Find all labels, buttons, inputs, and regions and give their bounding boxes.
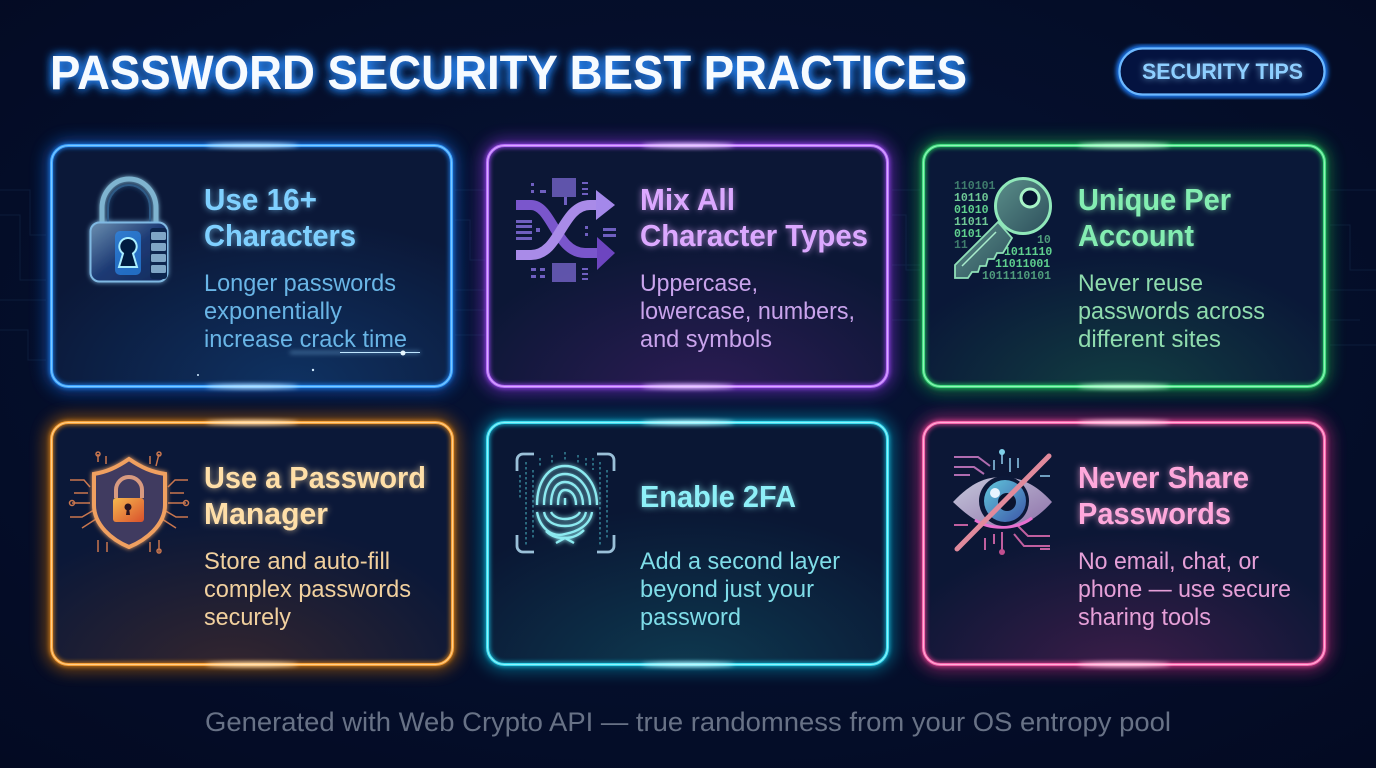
heading: Manager	[204, 496, 328, 531]
card frame: green	[924, 144, 1324, 388]
icon: key with binary digits: 1011110	[1004, 246, 1052, 259]
icon: key with binary digits: 1011110101	[982, 270, 1051, 283]
badge: security tips	[1120, 48, 1324, 94]
description: and symbols	[640, 326, 772, 353]
badge: security tips: SECURITY TIPS	[1142, 59, 1303, 84]
card frame: orange	[52, 420, 452, 666]
panel: never share passwords	[924, 420, 1324, 666]
heading	[204, 460, 426, 531]
card frame: purple	[488, 144, 888, 388]
heading: Use 16+	[204, 182, 317, 217]
card frame: blue	[52, 144, 452, 388]
panel: mix all character types	[488, 144, 888, 388]
description: securely	[204, 604, 291, 631]
description: sharing tools	[1078, 604, 1211, 631]
icon: key with binary digits: 11011	[954, 216, 989, 229]
description	[204, 548, 411, 631]
heading	[640, 182, 868, 253]
heading: Account	[1078, 218, 1194, 253]
panel: use a password manager	[52, 420, 452, 666]
heading: Passwords	[1078, 496, 1231, 531]
description: exponentially	[204, 298, 342, 325]
heading	[204, 182, 356, 253]
description: lowercase, numbers,	[640, 298, 855, 325]
heading: Characters	[204, 218, 356, 253]
icon: key with binary digits: 110101	[954, 180, 996, 193]
icon: key with binary digits: 11011001	[995, 258, 1050, 271]
icon: key with binary digits: 10110	[954, 192, 989, 205]
description	[640, 548, 840, 631]
icon: key with binary digits	[954, 178, 1052, 283]
description: Longer passwords	[204, 270, 396, 297]
description: Uppercase,	[640, 270, 758, 297]
description: complex passwords	[204, 576, 411, 603]
icon: key with binary digits: 01010	[954, 204, 989, 217]
card frame: cyan	[488, 420, 888, 666]
heading: Unique Per	[1078, 182, 1231, 217]
heading: Use a Password	[204, 460, 426, 495]
heading: Enable 2FA	[640, 479, 796, 514]
panel: use 16+ characters	[52, 144, 452, 388]
description	[640, 270, 855, 353]
icon: key with binary digits: 11	[954, 239, 968, 252]
description: increase crack time	[204, 326, 407, 353]
heading	[1078, 182, 1231, 253]
description: Never reuse	[1078, 270, 1203, 297]
panel: unique per account	[924, 144, 1324, 388]
description: password	[640, 604, 741, 631]
icon: shuffle arrows	[516, 178, 616, 282]
title: PASSWORD SECURITY BEST PRACTICES	[50, 47, 967, 100]
description	[204, 270, 407, 353]
heading	[1078, 460, 1249, 531]
icon: shield with padlock	[70, 452, 188, 553]
icon: fingerprint scanner	[515, 452, 616, 552]
footer note: Generated with Web Crypto API — true randomness from your OS entropy pool	[205, 707, 1171, 737]
description: phone — use secure	[1078, 576, 1291, 603]
icon: padlock	[90, 179, 168, 282]
description: beyond just your	[640, 576, 814, 603]
icon: key with binary digits: 10	[1037, 234, 1051, 247]
description: Store and auto-fill	[204, 548, 390, 575]
description: No email, chat, or	[1078, 548, 1259, 575]
description: passwords across	[1078, 298, 1265, 325]
description	[1078, 548, 1291, 631]
panel: enable 2fa	[488, 420, 888, 666]
heading: Never Share	[1078, 460, 1249, 495]
description: Add a second layer	[640, 548, 840, 575]
description: different sites	[1078, 326, 1221, 353]
heading: Mix All	[640, 182, 735, 217]
icon: crossed-out eye	[953, 449, 1052, 555]
heading: Character Types	[640, 218, 868, 253]
description	[1078, 270, 1265, 353]
card frame: pink	[924, 420, 1324, 666]
icon: key with binary digits: 0101	[954, 228, 982, 241]
